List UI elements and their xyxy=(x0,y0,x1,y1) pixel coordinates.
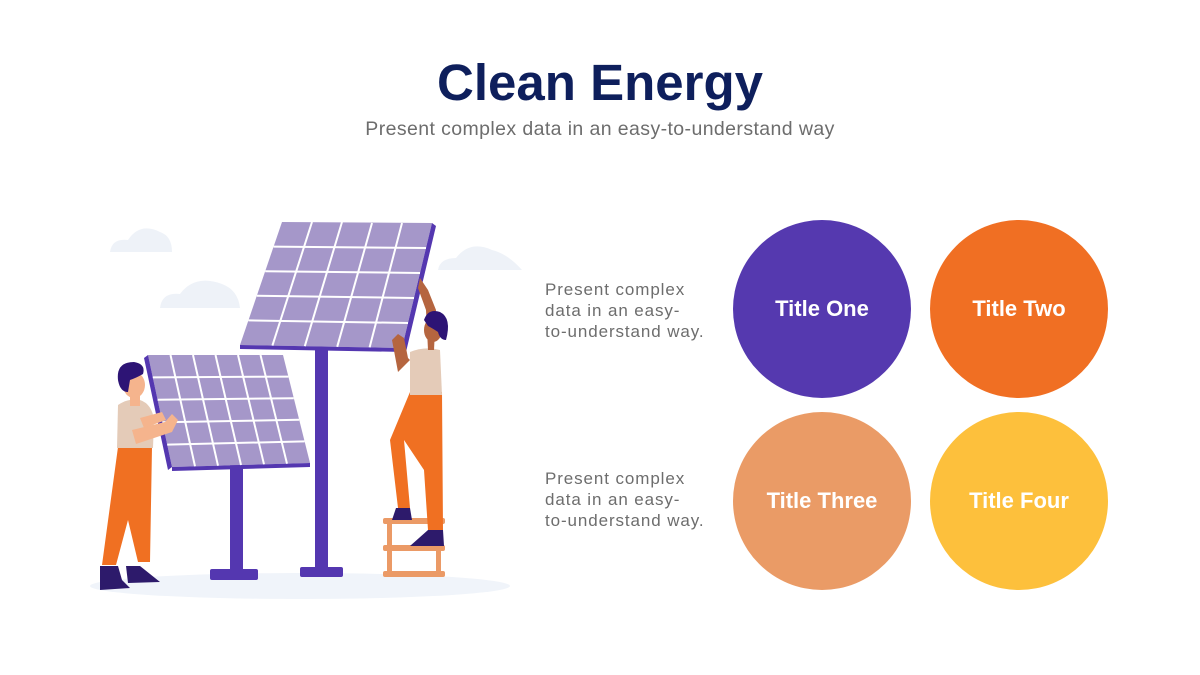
clouds xyxy=(110,228,522,308)
text block 2: to-understand way. xyxy=(545,511,705,530)
subtitle: Present complex data in an easy-to-understand way xyxy=(365,118,835,140)
circle: Title Three xyxy=(733,412,911,590)
text block 2: data in an easy- xyxy=(545,490,680,509)
text block 1: data in an easy- xyxy=(545,301,680,320)
big panel stand xyxy=(300,348,343,577)
text block 2 xyxy=(545,469,705,530)
circle: Title Three: Title Three xyxy=(767,488,877,513)
circle: Title Four xyxy=(930,412,1108,590)
circle: Title Four: Title Four xyxy=(969,488,1069,513)
text block 1 xyxy=(545,280,705,341)
person left xyxy=(100,362,178,590)
circle: Title Two: Title Two xyxy=(972,296,1066,321)
title: Clean Energy xyxy=(437,54,763,111)
circle: Title Two xyxy=(930,220,1108,398)
illustration: solar panels xyxy=(90,222,522,599)
small panel stand xyxy=(210,465,258,580)
text block 1: to-understand way. xyxy=(545,322,705,341)
stool xyxy=(383,518,445,577)
ground xyxy=(90,573,510,599)
person right xyxy=(390,278,448,546)
text block 2: Present complex xyxy=(545,469,685,488)
circle: Title One: Title One xyxy=(775,296,869,321)
big panel xyxy=(240,222,436,352)
text block 1: Present complex xyxy=(545,280,685,299)
small panel xyxy=(144,355,310,471)
circle: Title One xyxy=(733,220,911,398)
